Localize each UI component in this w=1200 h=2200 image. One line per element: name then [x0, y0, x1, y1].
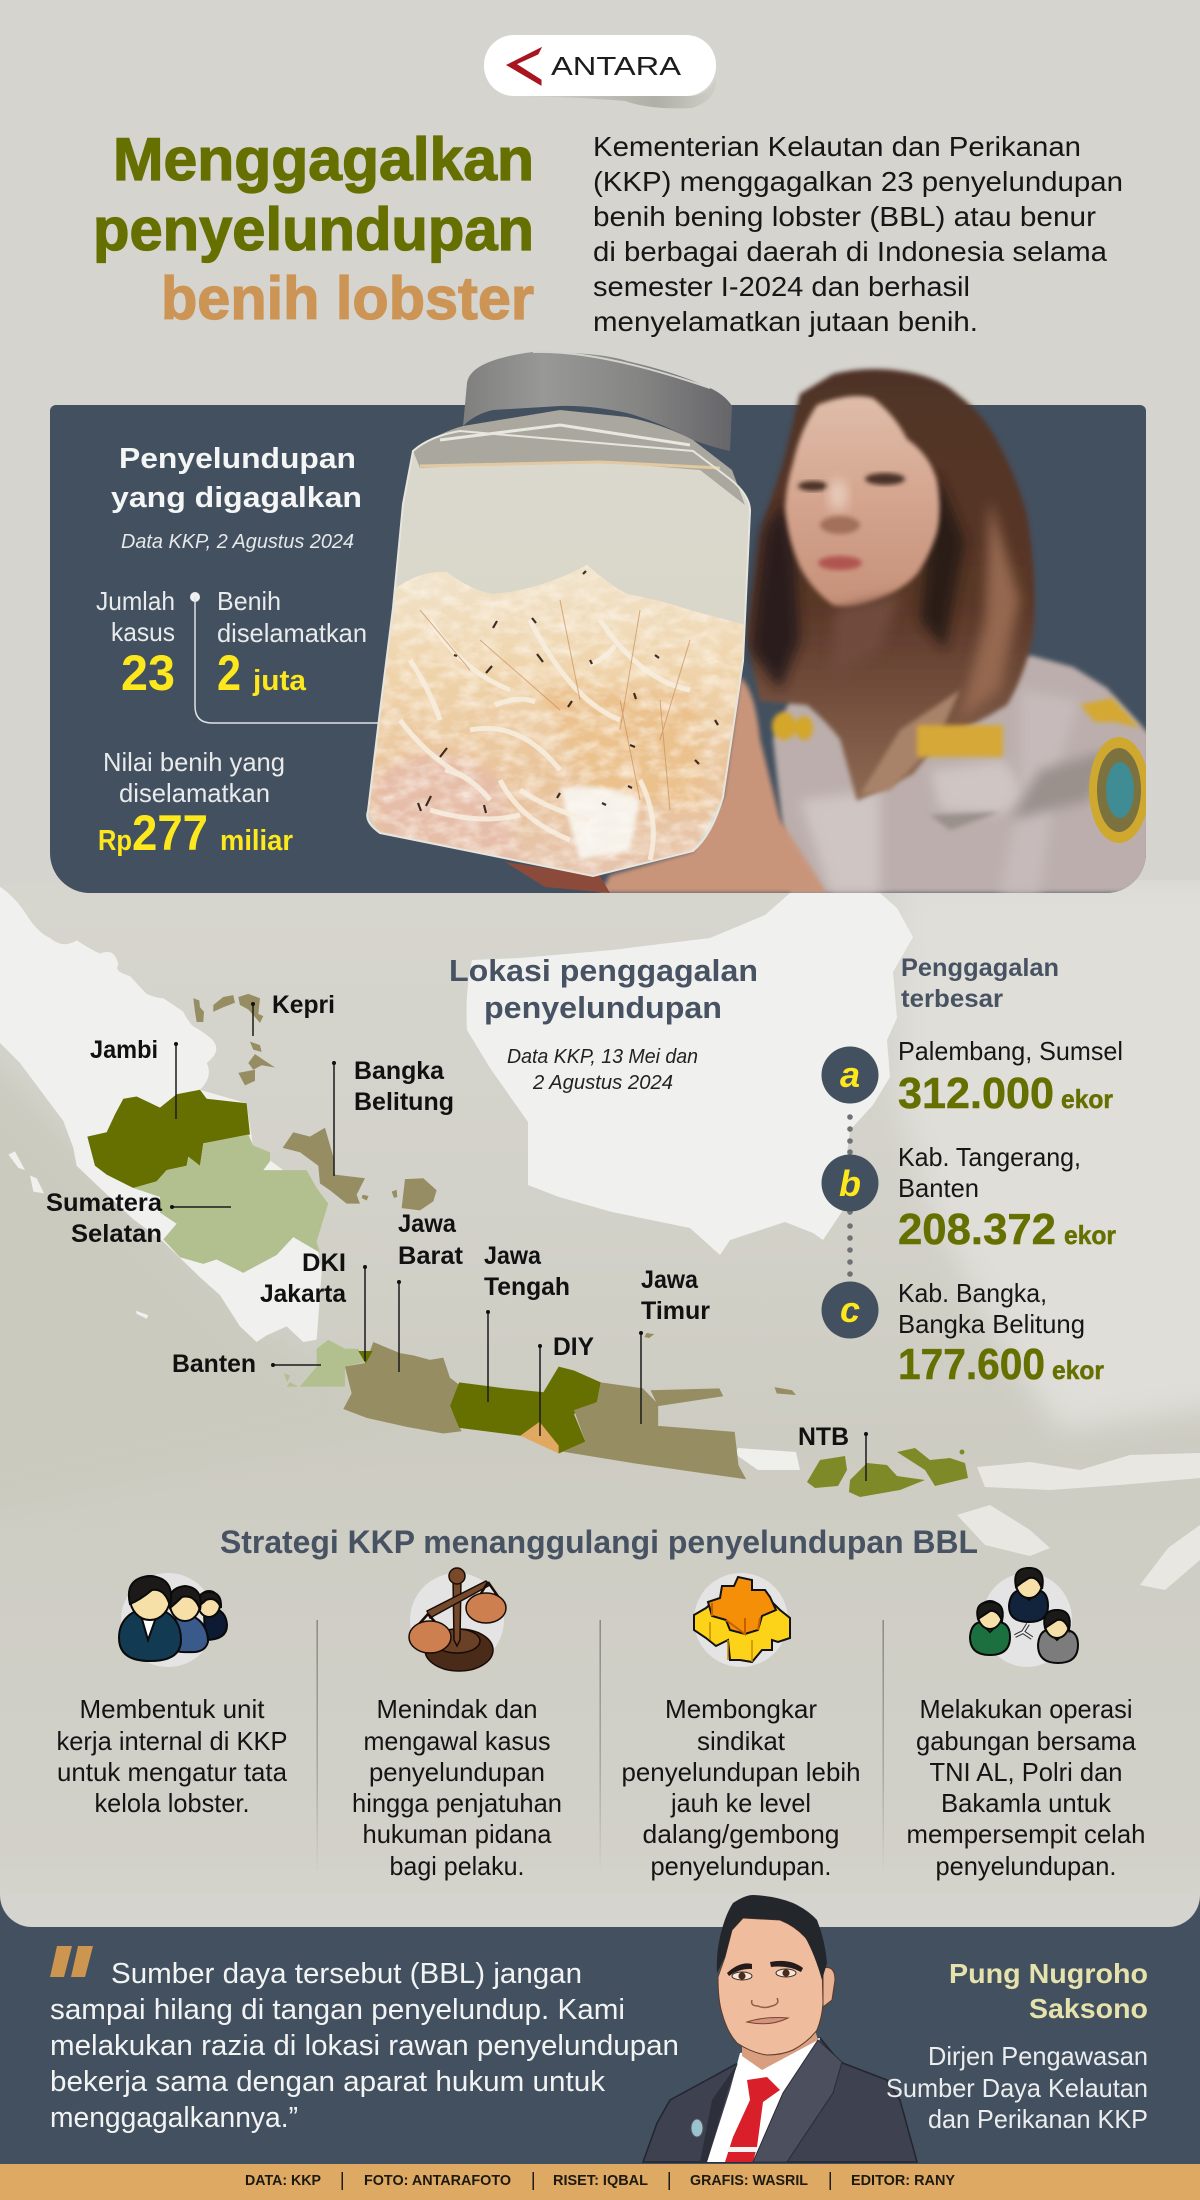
map heading: penyelundupan [484, 990, 722, 1025]
shirt [707, 2038, 820, 2162]
stat: benih diselamatkan: juta [252, 665, 307, 697]
officer: sleeve patch [1089, 737, 1149, 843]
panel heading [111, 443, 362, 514]
stat: jumlah kasus: Jumlah [96, 586, 175, 616]
strategy text 3: penyelundupan. [650, 1851, 832, 1881]
map province labels: DKI [302, 1249, 346, 1277]
seizure b: Banten [898, 1173, 979, 1203]
strategy text 3: dalang/gembong [642, 1819, 840, 1849]
strategy text 2: penyelundupan [369, 1757, 545, 1787]
stat: nilai benih: diselamatkan [119, 778, 270, 808]
text block: intro [593, 131, 1123, 337]
jar neck [413, 410, 745, 505]
map province labels: Jambi [90, 1036, 158, 1064]
logo: Antara pill: ANTARA [551, 51, 682, 81]
map province labels: Selatan [71, 1220, 162, 1248]
heading: largest seizures [901, 954, 1059, 1013]
province: Bangka Belitung [283, 1128, 437, 1210]
map leader lines [170, 1002, 868, 1481]
icon: scales of justice [409, 1568, 506, 1671]
seizure a: ekor [1061, 1084, 1113, 1114]
logo: Antara pill [484, 35, 716, 108]
seizure c: c [840, 1289, 860, 1330]
strategy text 3: Membongkar [665, 1694, 817, 1724]
map heading [449, 953, 758, 1025]
land: Sumatra [0, 887, 328, 1342]
seizure c: ekor [1052, 1355, 1104, 1385]
strategy text 4: penyelundupan. [936, 1851, 1116, 1881]
quote text: melakukan razia di lokasi rawan penyelundupan [50, 2030, 679, 2062]
strategy text 2: hukuman pidana [362, 1819, 552, 1849]
stat: nilai benih [98, 747, 293, 861]
officer: uniform [773, 640, 1150, 893]
nose [752, 1998, 778, 2008]
text block: intro: semester I-2024 dan berhasil [593, 271, 970, 302]
province: Jambi [87, 1090, 250, 1188]
seizure c: 177.600 [898, 1340, 1045, 1389]
map province labels: Tengah [484, 1273, 570, 1301]
stat: nilai benih: 277 [132, 805, 208, 861]
map: background land masses [0, 887, 1200, 1634]
footer credits: DATA: KKP [245, 2172, 321, 2189]
title: benih lobster [161, 265, 534, 332]
dividers [316, 1620, 884, 1870]
province: Sumatera Selatan [133, 1134, 328, 1273]
photo: officer holding jar of lobster seeds [360, 352, 1150, 893]
strategy text 2: bagi pelaku. [390, 1851, 524, 1881]
quote text: bekerja sama dengan aparat hukum untuk [50, 2066, 606, 2098]
strategy text 2: Menindak dan [376, 1694, 538, 1724]
title [93, 126, 534, 332]
map province labels: Sumatera [46, 1189, 163, 1217]
panel source note: Data KKP, 2 Agustus 2024 [121, 531, 354, 553]
stat: benih diselamatkan [217, 586, 367, 701]
role: dan Perikanan KKP [928, 2104, 1148, 2134]
strategy text 4: Bakamla untuk [941, 1788, 1112, 1818]
map province labels: Belitung [354, 1088, 454, 1116]
strategy text 3: sindikat [697, 1726, 786, 1756]
footer credits: FOTO: ANTARAFOTO [364, 2172, 511, 2189]
strategy text 2: hingga penjatuhan [352, 1788, 562, 1818]
officer: hair [747, 369, 1035, 801]
map source note [507, 1046, 698, 1094]
ear [823, 1968, 835, 2007]
strategy text 4: mempersempit celah [906, 1819, 1146, 1849]
map province labels: Banten [172, 1350, 256, 1378]
name: Pung Nugroho [949, 1958, 1148, 1989]
faint eastern islands [900, 880, 1200, 1430]
seizure a: a [840, 1054, 860, 1095]
officer: face [785, 396, 940, 607]
jar glass [368, 452, 749, 848]
officer: neck shadow [834, 590, 898, 664]
map province labels: Bangka [354, 1057, 445, 1085]
seizure b: ekor [1064, 1220, 1116, 1250]
name: Saksono [1029, 1993, 1148, 2024]
stat: benih diselamatkan: Benih [217, 586, 281, 616]
strategy text 3: penyelundupan lebih [622, 1757, 860, 1787]
map province labels: Jawa [398, 1210, 457, 1238]
seizure a: 312.000 [898, 1069, 1054, 1118]
seizure b: Kab. Tangerang, [898, 1142, 1081, 1172]
seizure b [822, 1142, 1116, 1254]
role: Dirjen Pengawasan [928, 2041, 1148, 2071]
title: penyelundupan [93, 196, 534, 263]
quote text: Sumber daya tersebut (BBL) jangan [111, 1958, 582, 1990]
seizure b: b [839, 1163, 861, 1204]
text block: intro: (KKP) menggagalkan 23 penyelundupan [593, 166, 1123, 197]
jar glass edge highlights [367, 431, 750, 876]
map province labels: Jawa [641, 1266, 699, 1294]
stat: nilai benih: Nilai benih yang [103, 747, 285, 777]
text block: intro: Kementerian Kelautan dan Perikanan [593, 131, 1081, 162]
province: Banten [284, 1340, 365, 1387]
province: Jawa Tengah [450, 1367, 601, 1454]
map source note: Data KKP, 13 Mei dan [507, 1046, 698, 1068]
map province labels: Jakarta [260, 1280, 347, 1308]
strategy text 3: jauh ke level [670, 1788, 811, 1818]
strategy text 1: kerja internal di KKP [56, 1726, 288, 1756]
province: Jawa Timur [562, 1333, 796, 1479]
map source note: 2 Agustus 2024 [532, 1072, 673, 1094]
hair [717, 1895, 827, 1980]
strategy text 3 [622, 1694, 860, 1881]
land: Bali [735, 1448, 800, 1470]
footer credits [245, 2172, 955, 2190]
icon: three people in suits [119, 1573, 227, 1667]
footer credits: GRAFIS: WASRIL [690, 2172, 808, 2189]
officer: epaulet [1080, 698, 1140, 728]
strategy text 1: untuk mengatur tata [57, 1757, 288, 1787]
stat: nilai benih: miliar [220, 825, 293, 857]
strategy text 4: TNI AL, Polri dan [930, 1757, 1122, 1787]
province: Kepri [193, 994, 275, 1085]
map province labels: Kepri [272, 991, 335, 1019]
connector line [190, 592, 378, 723]
seizure a [822, 1036, 1123, 1118]
jar contents: shrimp mass [360, 560, 760, 880]
footer credits: RISET: IQBAL [553, 2172, 648, 2189]
text block: intro: benih bening lobster (BBL) atau benur [593, 201, 1096, 232]
province: Jawa Barat [343, 1342, 462, 1434]
text block: intro: menyelamatkan jutaan benih. [593, 306, 978, 337]
strategy text 2 [352, 1694, 562, 1881]
title: Menggagalkan [113, 126, 534, 193]
face [718, 1918, 823, 2055]
stat: nilai benih: Rp [98, 825, 132, 857]
mouth [747, 2018, 788, 2024]
map heading: Lokasi penggagalan [449, 953, 758, 988]
strategy text 1 [56, 1694, 288, 1818]
seizure c [822, 1278, 1104, 1389]
dotted connector [847, 1114, 853, 1277]
quote text: menggagalkannya.” [50, 2102, 298, 2134]
map province labels: Timur [641, 1297, 710, 1325]
heading: largest seizures: terbesar [901, 985, 1003, 1013]
strategy text 4: Melakukan operasi [920, 1694, 1132, 1724]
footer bar [0, 2164, 1200, 2200]
strategy text 4: gabungan bersama [916, 1726, 1137, 1756]
role [886, 2041, 1148, 2134]
map province labels: Barat [398, 1242, 464, 1270]
officer: name tag [917, 725, 1003, 757]
map province labels: Jawa [484, 1242, 542, 1270]
brows [727, 1961, 803, 1976]
quote text [50, 1958, 679, 2134]
portrait: Pung Nugroho Saksono [643, 1895, 917, 2162]
panel: foiled smuggling stats [50, 405, 1146, 893]
map: highlighted western provinces [87, 994, 462, 1434]
map province labels [46, 991, 849, 1451]
darker sea southwest of Sumatra [0, 1079, 179, 1282]
suit [643, 2038, 917, 2162]
map province labels: DIY [553, 1333, 594, 1361]
seizure c: Bangka Belitung [898, 1309, 1085, 1339]
province: DKI Jakarta [358, 1351, 373, 1363]
text block: intro: di berbagai daerah di Indonesia selama [593, 236, 1107, 267]
stat: jumlah kasus: 23 [121, 645, 175, 701]
footer credits: EDITOR: RANY [851, 2172, 955, 2189]
strategy text 2: mengawal kasus [364, 1726, 550, 1756]
officer: collar pins [772, 712, 813, 740]
seizure c: Kab. Bangka, [898, 1278, 1047, 1308]
strategy text 1: kelola lobster. [94, 1788, 250, 1818]
icon: quotation mark [50, 1946, 93, 1977]
strategy text 1: Membentuk unit [80, 1694, 265, 1724]
seizure b: 208.372 [898, 1205, 1056, 1254]
hand holding jar [600, 677, 827, 893]
jar lid [463, 352, 732, 451]
stat: jumlah kasus [96, 586, 175, 701]
stat: benih diselamatkan: diselamatkan [217, 618, 367, 648]
heading: largest seizures: Penggagalan [901, 954, 1059, 982]
pin [691, 2119, 703, 2137]
icon: puzzle pieces [694, 1573, 790, 1667]
neck [742, 2030, 818, 2070]
logo shadow [513, 78, 716, 108]
heading: strategy: Strategi KKP menanggulangi penyelundupan BBL [220, 1524, 978, 1560]
eyes [732, 1972, 752, 1980]
panel heading: yang digagalkan [111, 482, 362, 514]
province: NTB [807, 1448, 968, 1497]
map province labels: NTB [798, 1423, 849, 1451]
land: eastern Lesser Sunda [977, 1453, 1200, 1490]
stat: benih diselamatkan: 2 [217, 645, 241, 701]
stat: jumlah kasus: kasus [111, 617, 175, 647]
strategy text 4 [906, 1694, 1146, 1881]
land: Timor [957, 1505, 1050, 1556]
province: DIY [520, 1422, 559, 1454]
map: highlighted eastern provinces [450, 1333, 796, 1479]
panel heading: Penyelundupan [119, 443, 356, 475]
seizure a: Palembang, Sumsel [898, 1036, 1123, 1066]
role: Sumber Daya Kelautan [886, 2073, 1148, 2103]
name [949, 1958, 1148, 2024]
land: Kalimantan [467, 893, 913, 1255]
lapel [753, 2040, 842, 2162]
icon: three people collaborating [970, 1568, 1078, 1667]
quote text: sampai hilang di tangan penyelundup. Kami [50, 1994, 625, 2026]
icon: red chevron [507, 48, 541, 85]
tie [725, 2077, 780, 2162]
